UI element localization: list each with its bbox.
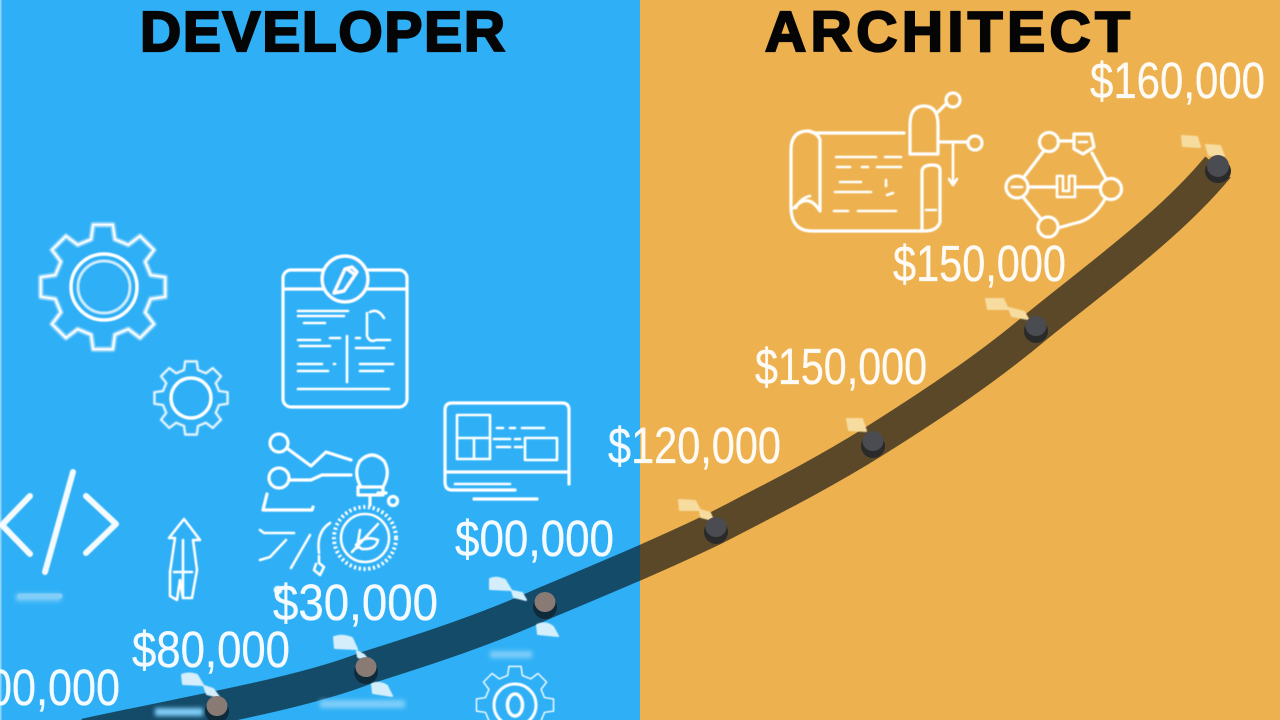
- markers: blue side faint smudges: [16, 594, 532, 716]
- chart: rising salary curve, architect side: [640, 156, 1231, 581]
- heading: developer: DEVELOPER: [140, 0, 505, 64]
- icon: monitor with wireframe: [445, 403, 569, 499]
- heading: architect: ARCHITECT: [765, 0, 1130, 64]
- icon: node network: [1006, 132, 1122, 237]
- label: salary 6: $150,000: [755, 338, 927, 395]
- label: salary 2: $80,000: [132, 621, 290, 678]
- panel: architect background: [640, 0, 1280, 720]
- label: salary 5: $120,000: [608, 417, 781, 474]
- chart: rising salary curve, developer side: [82, 544, 640, 720]
- icon: small gear: [154, 361, 228, 435]
- label: salary 7: $150,000: [893, 235, 1066, 292]
- icon: upward arrow tool: [169, 519, 200, 600]
- icon: bottom gear: [476, 666, 554, 720]
- icon: blueprint scroll: [791, 93, 982, 231]
- icon: circuit network with gear: [260, 434, 398, 593]
- panel: developer background: [0, 0, 640, 720]
- markers: salary points developer side: [205, 592, 557, 720]
- markers: blue side highlight chips: [182, 578, 558, 697]
- icon: code brackets: [2, 472, 116, 596]
- icon: large gear: [41, 225, 165, 349]
- label: salary 4: $00,000: [455, 510, 614, 567]
- icon: document with pencil badge: [283, 256, 407, 407]
- markers: orange side highlight chips: [679, 136, 1224, 520]
- label: salary 3: $30,000: [273, 574, 438, 631]
- markers: salary points architect side: [704, 155, 1231, 544]
